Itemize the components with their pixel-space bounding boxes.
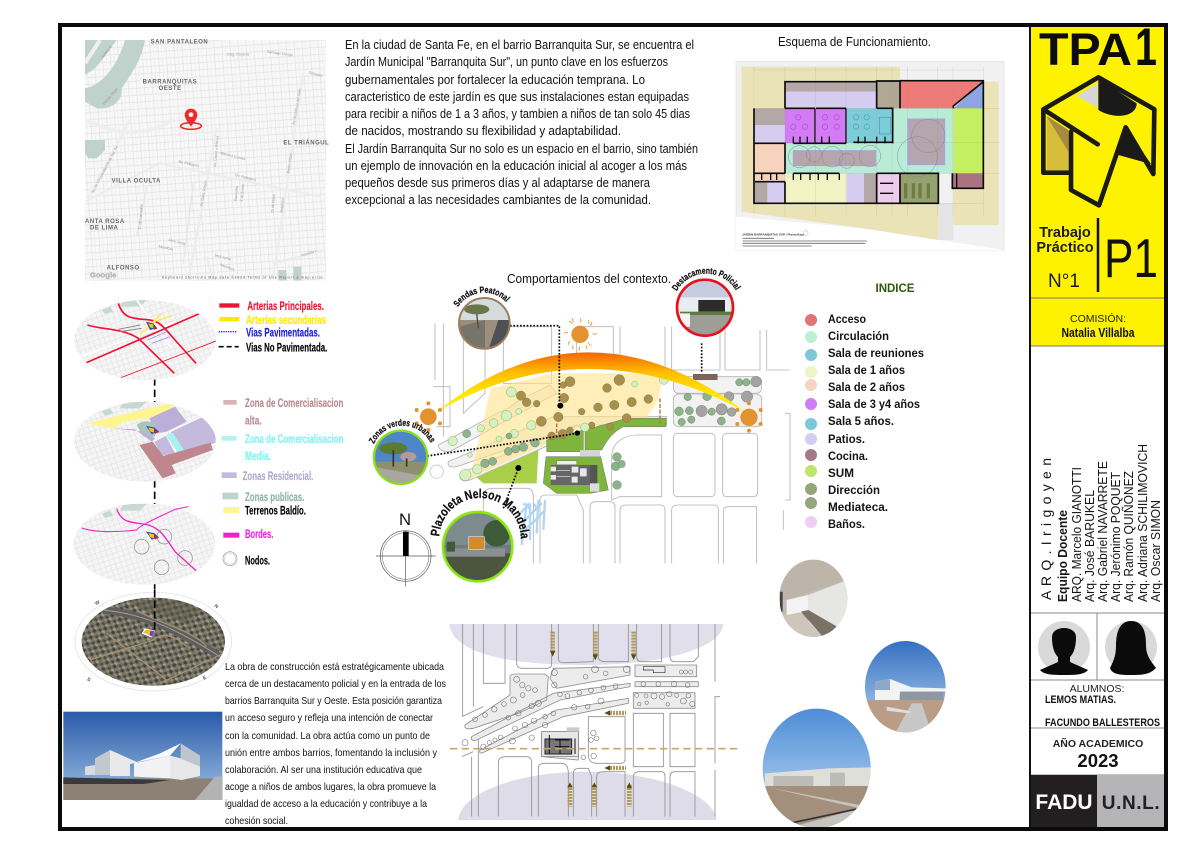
icon: north compass: N [399,510,411,529]
panel: teaching staff [1038,444,1163,602]
photo: building exterior [63,712,222,800]
label: academic year: AÑO ACADEMICO [1053,737,1143,750]
panel: title block [1030,18,1164,829]
satellite map: S [86,677,92,684]
green spaces [477,418,666,493]
label: comision: Natalia Villalba [1062,325,1135,340]
label: plazoleta nelson mandela: Plazoleta Nelson Mandela [430,488,530,539]
text block: intro: excepcional a las necesidades cambiantes de la comunidad. [345,193,651,207]
legend: roads: Vias No Pavimentada. [246,340,327,354]
map place labels: Mendoza [158,244,175,252]
panel: teaching staff: A R Q . I r i g o y e n [1038,458,1054,600]
map place labels: BARRANQUITAS [143,80,197,86]
map place labels: Bv. Pellegrini [235,173,256,182]
panel: index legend: Cocina. [828,449,868,463]
panel: teaching staff: Equipo Docente [1055,510,1070,602]
label: students [1045,683,1160,729]
plan caption [742,231,867,246]
legend: land use: Zonas publicas. [245,490,304,504]
map place labels: OESTE [159,86,182,92]
label: comision [1062,312,1135,340]
label: trabajo practico: Práctico [1036,240,1094,256]
photo: covered gallery [779,560,847,637]
map place labels: Salado R [100,45,113,59]
room colour zones [754,81,983,203]
photo: zonas verdes [373,431,430,485]
text block: location description: igualdad de acceso a la educación y contribuye a la [225,798,427,810]
legend: land use [222,396,343,518]
icon: north compass [376,510,436,587]
satellite map: W [94,599,101,607]
logo: FADU UNL [1031,775,1164,827]
panel: teaching staff: Arq. Jerónimo POQUET [1108,472,1123,602]
text block: location description: con la comunidad. La obra actúa como un punto de [225,730,430,742]
legend: land use: Media. [245,449,271,463]
panel: index legend: Acceso [828,312,866,326]
panel: index legend: SUM [828,466,854,480]
satellite map [75,590,232,691]
map place labels: Av. de Circunvalación de Sta. Fe [91,145,119,194]
label: zonas verdes urbanas: Zonas verdes urbanas [368,419,434,444]
legend: edges and nodes: Bordes. [245,527,273,541]
label: destacamento policial: Destacamento Policial [672,268,742,291]
text block: location description: cohesión social. [225,815,288,827]
map place labels: Bv. Pellegrini [178,160,200,168]
map place labels: 1era Junta [168,238,187,246]
panel: teaching staff: Arq. Adriana SCHILIMOVICH [1135,444,1150,602]
panel: teaching staff: Arq. Oscar SIMON [1148,500,1163,602]
photo: destacamento policial [677,278,733,337]
panel: teaching staff: Arq. Ramón QUIÑONEZ [1121,471,1136,602]
map place labels: DE LIMA [90,225,118,231]
panel: index legend: Sala 5 años. [828,414,894,428]
map place labels: ALFONSO [107,266,140,272]
text block: intro: Jardín Municipal "Barranquita Sur", un punto clave en los esfuerzos [345,55,668,69]
panel: teaching staff: ARQ. Marcelo GIANOTTI [1069,467,1084,602]
map place labels: Saavedra [234,185,239,202]
map place labels: Pedro Vittori [286,153,293,173]
label: students: FACUNDO BALLESTEROS [1045,717,1160,729]
map place labels: 1era Junta [214,253,232,262]
heading: comportamientos del contexto: Comportamientos del contexto. [507,271,671,286]
legend: edges and nodes [223,527,273,567]
map place labels: 25 de Mayo [270,194,276,213]
photo: sendas peatonal [458,298,512,350]
panel: index legend: Sala de 3 y4 años [828,397,920,411]
map place labels: Av. Gdor. Freyre [199,180,208,207]
map place labels: VILLA OCULTA [112,179,161,185]
plan caption: JARDIN BARRANQUITAS SUR / Planta Baja [742,232,804,236]
urban plan [449,624,723,820]
panel: index legend: Mediateca. [828,500,888,514]
label: comision: COMISIÓN: [1070,312,1126,325]
text block: location description: un acceso seguro y refleja una intención de conectar [225,712,433,724]
icon: map pin [181,109,201,129]
label: students: ALUMNOS: [1070,683,1124,695]
arrows: traffic chevrons [550,632,636,807]
text block: intro: para recibir a niños de 1 a 3 años, y tambien a niños de tan solo 45 dias [345,107,690,121]
label: students: LEMOS MATIAS. [1045,694,1116,706]
map place labels: SAN PANTALEON [151,39,208,45]
label: trabajo practico [1036,225,1094,292]
legend: land use: Zona de Comercialisacion [245,432,343,446]
map layer: land use [74,401,216,482]
panel: index legend: Circulación [828,329,889,343]
legend: roads [219,299,327,354]
label: P1: P1 [1104,227,1158,289]
legend: land use: alta. [245,413,262,427]
icon: student avatar female [1105,621,1157,675]
photo: street facade [763,709,871,829]
sun path arc [437,352,745,412]
panel: floor plan [736,62,1004,250]
label: academic year [1053,737,1143,771]
map place labels: Santiago Derqui [267,50,293,57]
text block: location description: cerca de un destacamento policial y en la entrada de los [225,678,446,690]
legend: roads: Arterias secundarias [246,313,326,327]
map place labels: ANTA ROSA [85,219,125,225]
text block: intro: En la ciudad de Santa Fe, en el barrio Barranquita Sur, se encuentra el [345,38,694,52]
text block: intro: pequeños desde sus primeros días y al adaptarse de manera [345,176,650,190]
panel: location map [85,39,329,281]
text block: intro [345,38,698,207]
panel: teaching staff: Arq. Gabriel NAVARRETE [1095,461,1110,602]
logo: FADU UNL: FADU [1035,791,1093,814]
text block: location description: barrios Barranquita Sur y Oeste. Esta posición garantiza [225,695,442,707]
street blocks [433,323,790,563]
dashed connector [152,378,157,627]
panel: index legend: Sala de 2 años [828,380,905,394]
panel: index legend: Baños. [828,517,865,531]
yellow influence zone [470,373,663,478]
title: TPA 1: 1 [1135,18,1157,77]
map place labels: Av. Aristóbulo del Valle [292,88,302,125]
photo: courtyard [865,641,946,733]
text block: intro: de nacidos, mostrando su flexibilidad y adaptabilidad. [345,124,621,138]
map place labels [85,39,329,280]
legend: land use: Terrenos Baldío. [245,504,306,518]
map place labels: Belgrano [280,198,285,213]
map place labels: EL TRIÁNGUL [283,139,329,146]
text block: location description [225,661,446,827]
map place labels: Google [90,270,116,279]
text block: intro: gubernamentales por fortalecer la educación temprana. Lo [345,73,645,87]
map layer: road hierarchy [74,300,216,380]
title: TPA 1 [1039,18,1157,77]
text block: intro: El Jardín Barranquita Sur no solo es un espacio en el barrio, sino también [345,142,698,156]
icon: sun noon [564,318,597,351]
label: trabajo practico: Trabajo [1039,225,1091,241]
index heading: INDICE [876,283,915,295]
map place labels: Av. López y Planes [213,135,220,167]
panel: index legend [805,283,924,531]
map place labels: Keyboard shortcuts Map data ©2023 Terms of Use Report a map error [162,276,323,280]
icon: sun west [735,401,763,433]
photo: plazoleta nelson mandela [442,512,513,583]
text block: location description: colaboración. Al ser una institución educativa que [225,764,422,776]
legend: roads: Arterias Principales. [247,299,324,313]
label: sendas peatonal: Sendas Peatonal [454,286,511,306]
text block: intro: un ejemplo de innovación en la educación inicial al acoger a los más [345,159,687,173]
map place labels: 4 de Enero [240,184,245,202]
label: trabajo practico: N°1 [1048,271,1080,292]
legend: land use: Zona de Comercialisacion [245,396,343,410]
text block: location description: acoge a niños de ambos lugares, la obra promueve la [225,781,436,793]
walls [754,81,983,203]
icon: wind [520,500,545,545]
icon: sun east [415,401,442,432]
text block: location description: La obra de construcción está estratégicamente ubicada [225,661,444,673]
legend: land use: Zonas Residencial. [243,469,313,483]
panel: index legend: Dirección [828,483,880,497]
map place labels: Mendoza [220,263,236,272]
panel: index legend: Sala de 1 años [828,363,905,377]
map place labels: Avenida L [301,249,317,258]
map place labels: Salado River [102,87,119,106]
panel: teaching staff: Arq. José BARUKEL [1082,490,1097,602]
map place labels: Mariano Comas [220,151,246,161]
map place labels: Dag. Goyena [227,52,250,56]
icon: student avatar male [1038,621,1090,675]
panel: index legend: Patios. [828,432,865,446]
panel: analysis layer maps [74,300,343,590]
map place labels: D. de Lamadrid [138,204,144,229]
title: TPA 1: TPA [1039,24,1132,75]
police building on plan [693,374,717,380]
logo: FADU UNL: U.N.L. [1102,793,1160,814]
satellite map: N [213,603,219,610]
map layer: edges and nodes [73,503,215,585]
panel: urban plan and photos [449,560,946,829]
text block: location description: unión entre ambos barrios, fomentando la inclusión y [225,747,438,759]
heading: esquema de funcionamiento: Esquema de Funcionamiento. [778,34,931,49]
label: academic year: 2023 [1077,750,1119,771]
map place labels: Salvador [308,70,324,78]
satellite map: E [202,675,208,682]
legend: edges and nodes: Nodos. [245,553,270,567]
text block: intro: caracteristico de este jardín es que sus instalaciones estan equipadas [345,90,689,104]
panel: index legend: Sala de reuniones [828,346,924,360]
section line [450,746,738,751]
icon: FADU logo [1043,77,1154,205]
dotted leaders [427,326,702,508]
legend: roads: Vias Pavimentadas. [246,326,320,340]
panel: context site plan [368,268,820,617]
trees [448,375,761,489]
